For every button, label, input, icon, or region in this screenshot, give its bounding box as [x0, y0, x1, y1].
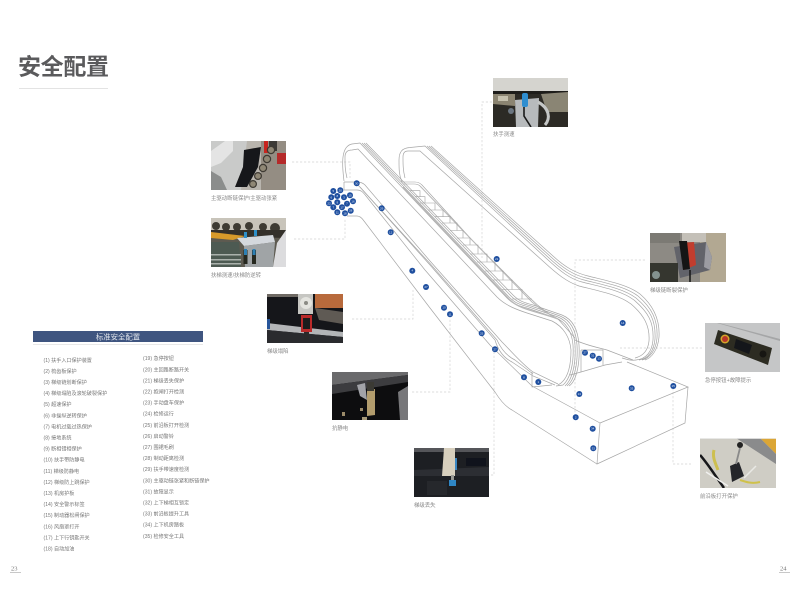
- far balustrade: [399, 146, 659, 360]
- photo: handrail speed sensors: [211, 218, 286, 279]
- numbered safety markers: 16: [351, 199, 355, 203]
- caption: 梯级塌陷: [267, 347, 289, 355]
- list column 1: (5) 超速保护: [44, 401, 72, 408]
- numbered safety markers: 1: [537, 380, 539, 384]
- list column 1: [44, 357, 107, 552]
- photo: main drive chain: [211, 141, 286, 202]
- photo: handrail speed measurement: [493, 78, 568, 138]
- dashed leader lines: [292, 102, 702, 475]
- numbered safety markers: 7: [332, 205, 334, 209]
- list column 1: (12) 梯级防上跳保护: [44, 479, 90, 486]
- list column 1: (17) 上下行钥匙开关: [44, 534, 90, 541]
- near balustrade: [343, 143, 600, 464]
- numbered safety markers: 13: [597, 357, 601, 361]
- photo: emergency stop button and fault display: [705, 323, 780, 384]
- numbered safety markers: 18: [343, 211, 347, 215]
- numbered safety markers: 25: [480, 331, 484, 335]
- list column 2: (21) 梯级丢失保护: [143, 377, 184, 384]
- numbered safety markers: 11: [336, 210, 339, 214]
- numbered safety markers: 13: [578, 392, 581, 396]
- caption: 扶手测速: [493, 130, 515, 138]
- list column 2: (25) 前沿板打开检测: [143, 422, 189, 429]
- numbered safety markers: 33: [592, 446, 595, 450]
- photo: front plate open protection: [700, 438, 776, 500]
- escalator line drawing: [343, 143, 688, 464]
- list column 1: (13) 机房护板: [44, 490, 74, 497]
- numbered safety markers: 7: [346, 202, 348, 206]
- page number 24: 24: [780, 566, 787, 572]
- numbered safety markers: 3: [343, 195, 345, 199]
- list column 2: (28) 制动距离检测: [143, 455, 184, 462]
- list column 1: (3) 梯级链划断保护: [44, 379, 87, 386]
- numbered safety markers: 5: [332, 189, 334, 193]
- numbered safety markers: 25: [672, 384, 675, 388]
- numbered safety markers: 27: [424, 285, 428, 289]
- caption: 梯级链断裂保护: [650, 286, 688, 294]
- numbered safety markers: 9: [336, 200, 338, 204]
- numbered safety markers: 12: [389, 230, 393, 234]
- list column 2: (22) 抱闸打开检测: [143, 388, 184, 396]
- caption: 抗静电: [332, 424, 349, 432]
- list column 1: (6) 非操纵逆转保护: [44, 412, 87, 419]
- list column 1: (2) 梳齿板保护: [44, 368, 77, 375]
- caption: 前沿板打开保护: [700, 492, 738, 500]
- numbered safety markers: 20: [339, 188, 342, 192]
- photo: step sag switch: [267, 294, 343, 355]
- numbered safety markers: 4: [411, 269, 413, 273]
- lower truss box: [532, 350, 688, 464]
- caption: 急停按钮+故障提示: [705, 376, 752, 384]
- numbered safety markers: 2: [575, 415, 577, 419]
- list column 2: (33) 前沿板提升工具: [143, 511, 189, 518]
- numbered safety markers: 8: [523, 375, 525, 379]
- list column 1: (10) 扶手带防静电: [44, 457, 85, 464]
- numbered safety markers: 27: [493, 347, 497, 351]
- caption: 扶梯测速/扶梯防逆转: [211, 271, 262, 279]
- numbered safety markers: 17: [340, 205, 344, 209]
- page number 23: 23: [11, 566, 18, 572]
- numbered safety markers: 6: [330, 195, 332, 199]
- numbered safety markers: 15: [348, 193, 352, 197]
- list column 2: (34) 上下机房踏板: [143, 522, 184, 529]
- caption: 主驱动断链保护/主驱动张紧: [211, 194, 278, 202]
- list column 2: (23) 手动盘车保护: [143, 400, 184, 407]
- photo: missing step sensor: [414, 448, 489, 509]
- list column 1: (11) 梯级防静电: [44, 468, 79, 475]
- heading: standard safety configuration: [33, 331, 203, 345]
- numbered safety markers: 21: [495, 257, 499, 261]
- list column 1: (18) 自动加油: [44, 546, 74, 552]
- list column 2: (27) 围裙毛刷: [143, 444, 174, 451]
- list column 1: (9) 断相错相保护: [44, 446, 82, 453]
- numbered safety markers: 31: [591, 354, 595, 358]
- list column 1: (14) 安全警示标签: [44, 501, 85, 508]
- numbered safety markers: 8: [336, 194, 338, 198]
- list column 1: (1) 扶手入口保护装置: [44, 357, 92, 364]
- list column 2: (31) 故障显示: [143, 488, 174, 495]
- panel: standard safety configuration list: [33, 331, 210, 552]
- numbered safety markers: [326, 180, 676, 451]
- numbered safety markers: 22: [327, 201, 331, 205]
- caption: 梯级丢失: [414, 501, 436, 509]
- list column 2: (32) 上下梯相互锁定: [143, 500, 189, 506]
- numbered safety markers: 34: [591, 427, 595, 431]
- photo: step chain break protection: [650, 233, 726, 294]
- list column 1: (15) 制动器松闸保护: [44, 512, 90, 519]
- photo: anti-static brush: [332, 372, 408, 432]
- list column 2: (20) 主回路断路开关: [143, 366, 189, 373]
- numbered safety markers: 11: [448, 312, 452, 316]
- numbered safety markers: 33: [630, 386, 634, 390]
- list column 2: (26) 启动警铃: [143, 433, 174, 440]
- page number 24: [779, 566, 790, 573]
- list column 2: (35) 检修安全工具: [143, 533, 184, 540]
- numbered safety markers: 14: [621, 321, 625, 325]
- list column 1: (4) 梯级塌陷及滚轮破裂保护: [44, 390, 107, 397]
- list column 2: (19) 急停按钮: [143, 355, 174, 362]
- list column 1: (16) 风扇罩打开: [44, 523, 79, 530]
- list column 2: (29) 扶手带速度检测: [143, 466, 189, 473]
- page number 23: [10, 566, 21, 573]
- numbered safety markers: 30: [355, 181, 359, 185]
- numbered safety markers: 27: [583, 351, 587, 355]
- escalator steps: [402, 182, 575, 338]
- list column 2: [143, 355, 210, 540]
- title: 安全配置: [18, 54, 109, 80]
- numbered safety markers: 10: [442, 306, 446, 310]
- heading: standard safety configuration: 标准安全配置: [96, 332, 140, 341]
- numbered safety markers: 29: [380, 206, 384, 210]
- list column 2: (30) 主驱动链张紧和断链保护: [143, 477, 210, 484]
- list column 1: (8) 接地系统: [44, 434, 72, 442]
- list column 2: (24) 检修运行: [143, 411, 174, 418]
- numbered safety markers: 28: [349, 209, 353, 213]
- list column 1: (7) 电机过载过热保护: [44, 423, 92, 430]
